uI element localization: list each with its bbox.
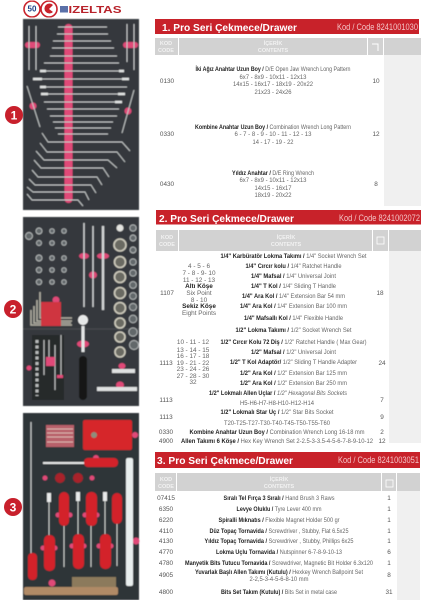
table rows: drawer 2: 4 - 5 - 6 (188, 263, 210, 270)
table rows: drawer 2: Sekiz Köşe (182, 303, 216, 310)
quantity column background: drawer 2 (389, 251, 421, 443)
table rows: drawer 3: 6350 (159, 506, 174, 513)
table rows: drawer 1: 6 - 7 - 8 - 9 - 10 - 11 - 12 - 13 (234, 131, 312, 138)
table rows: drawer 3: 6 (387, 549, 391, 556)
table rows: drawer 2: 1/4" Mafsallı Kol / 1/4" Flexible Handle (244, 315, 343, 322)
table rows: drawer 1: 14x15 - 16x17 - 18x19 - 20x22 (233, 81, 313, 88)
table rows: drawer 2: 19 - 21 - 22 (177, 360, 210, 367)
table rows: drawer 2: 2 (380, 429, 384, 436)
table rows: drawer 2: 13 - 14 - 15 (177, 347, 210, 354)
table rows: drawer 1: 18x19 - 20x22 (254, 192, 292, 199)
table header: drawer 2: CONTENTS (271, 242, 301, 248)
table rows: drawer 2: 0330 (159, 429, 174, 436)
table rows: drawer 2: 7 - 8 - 9- 10 (182, 270, 216, 277)
table header: drawer 2: İÇERİK (277, 234, 295, 241)
table rows: drawer 3: Manyetik Bits Tutucu Tornavida / Screwdriver, Magnetic Bit Holder 6.3x120 (185, 560, 373, 567)
table rows: drawer 2: 1/2" Lokmalı Allen Uçlar / 1/2" Hexagonal Bits Sockets (209, 390, 348, 397)
quantity column background: drawer 3 (397, 491, 420, 600)
table rows: drawer 3: 31 (385, 589, 393, 596)
table rows: drawer 2: 1/4" Ara Kol / 1/4" Extension Bar 54 mm (242, 293, 345, 300)
table rows: drawer 1: 14x15 - 16x17 (254, 185, 292, 192)
table rows: drawer 2: 1113 (159, 360, 173, 367)
table header: drawer 2 (156, 230, 421, 251)
table rows: drawer 1: İki Ağız Anahtar Uzun Boy / D/E Open Jaw Wrench Long Pattern (196, 64, 351, 73)
table rows: drawer 3: 4110 (159, 528, 173, 535)
heading band: drawer 1: 1. Pro Seri Çekmece/Drawer (162, 23, 297, 34)
table rows: drawer 1: Yıldız Anahtar / D/E Ring Wrench (232, 170, 314, 177)
table rows: drawer 3: 4905 (159, 572, 174, 579)
heading band: drawer 1 (155, 19, 419, 34)
table header: drawer 3 (155, 473, 420, 491)
table header: drawer 1: KOD (160, 41, 172, 47)
table rows: drawer 3 (157, 495, 393, 596)
table rows: drawer 3: 4130 (159, 538, 174, 545)
table rows: drawer 2: 1/4" Karbüratör Lokma Takımı / 1/4" Socket Wrench Set (220, 253, 367, 260)
table rows: drawer 2: 1113 (159, 414, 173, 421)
table rows: drawer 3: 1 (387, 528, 391, 535)
table rows: drawer 3: Bits Set Takım (Kutulu) / Bits Set in metal case (221, 589, 337, 596)
table rows: drawer 1: 6x7 - 8x9 - 10x11 - 12x13 (240, 177, 307, 184)
table rows: drawer 2: 1/2" Lokmalı Star Uç / 1/2" Star Bits Socket (220, 409, 334, 416)
table header: drawer 3: İÇERİK (270, 476, 288, 483)
table rows: drawer 1: 21x23 - 24x26 (254, 89, 292, 96)
table rows: drawer 2: 1/4" T Kol / 1/4" Sliding T Handle (251, 283, 336, 290)
table rows: drawer 3: 1 (387, 538, 391, 545)
table header: drawer 1: İÇERİK (264, 40, 282, 47)
table rows: drawer 3: Sıralı Tel Fırça 3 Sıralı / Hand Brush 3 Raws (224, 495, 334, 502)
table rows: drawer 3: 07415 (157, 495, 175, 502)
table header: drawer 1 (155, 38, 421, 55)
table rows: drawer 3: Yuvarlak Başlı Allen Takımı (Kutulu) / Hexkey Wrench Ballpoint Set (195, 569, 363, 576)
table rows: drawer 1: 0430 (160, 181, 175, 188)
table rows: drawer 3: 6220 (159, 517, 174, 524)
table rows: drawer 2: 1/2" Ara Kol / 1/2" Extension Bar 125 mm (240, 370, 347, 377)
table rows: drawer 3: Levye Oluklu / Tyre Lever 400 mm (236, 506, 322, 513)
table rows: drawer 3: 4780 (159, 560, 174, 567)
table header: drawer 1: CODE (158, 48, 174, 54)
table rows: drawer 1: 0130 (160, 78, 175, 85)
table rows: drawer 2: 9 (380, 414, 384, 421)
table rows: drawer 1: 12 (372, 131, 380, 138)
table rows: drawer 3: Düz Topaç Tornavida / Screwdriver , Stubby, Flat 6.5x25 (210, 528, 349, 535)
table rows: drawer 1: Kombine Anahtar Uzun Boy / Combination Wrench Long Pattern (195, 124, 351, 131)
table rows: drawer 3: 1 (387, 495, 391, 502)
heading band: drawer 3 (155, 452, 420, 468)
badge: 2: 2 (10, 302, 17, 316)
table rows: drawer 3: 8 (387, 572, 391, 579)
table rows: drawer 2: 8 - 10 (191, 297, 208, 304)
table rows: drawer 3: Lokma Uçlu Tornavida / Nutspinner 6-7-8-9-10-13 (216, 549, 342, 556)
badge: 1: 1 (11, 108, 18, 122)
table rows: drawer 1: 14 - 17 - 19 - 22 (252, 139, 294, 146)
table rows: drawer 2: 1113 (159, 397, 173, 404)
table rows: drawer 2: 1/2" Cırcır Kolu 72 Diş / 1/2" Ratchet Handle ( Max Gear) (220, 339, 367, 346)
logo: Izeltas 50 years (24, 1, 122, 17)
table rows: drawer 2: Altı Köşe (185, 283, 213, 290)
table rows: drawer 2: 4900 (159, 438, 174, 445)
table header: drawer 2: CODE (159, 242, 175, 248)
table rows: drawer 2: 1107 (160, 290, 174, 297)
heading band: drawer 2: 2. Pro Seri Çekmece/Drawer (159, 214, 294, 225)
table header: drawer 3: KOD (160, 477, 172, 483)
table rows: drawer 2: 18 (376, 290, 384, 297)
table rows: drawer 2: 1/2" Mafsal / 1/2" Universal Joint (251, 349, 336, 356)
heading band: drawer 2 (156, 210, 421, 225)
table header: drawer 3: CONTENTS (264, 484, 294, 490)
table rows: drawer 3: 4800 (159, 589, 174, 596)
table rows: drawer 1: 6x7 - 8x9 - 10x11 - 12x13 (240, 74, 307, 81)
table rows: drawer 2: 23 - 24 - 26 (177, 366, 210, 373)
table rows: drawer 2: 11 - 12 - 13 (183, 277, 216, 284)
table rows: drawer 2: 1/4" Ara Kol / 1/4" Extension Bar 100 mm (240, 303, 347, 310)
table rows: drawer 2: 1/2" T Kol Adaptör/ 1/2" Sliding T Handle Adapter (230, 359, 358, 366)
table rows: drawer 1: 8 (374, 181, 378, 188)
table rows: drawer 3: 4770 (159, 549, 174, 556)
logo: Izeltas 50 years: IZELTAS (68, 4, 122, 16)
table rows: drawer 3: Spiralli Mıknatıs / Flexible Magnet Holder 500 gr (218, 517, 340, 524)
panel: drawer 3 tool tray (23, 413, 140, 600)
table rows: drawer 2: T20-T25-T27-T30-T40-T45-T50-T55-T60 (224, 420, 330, 427)
table rows: drawer 2: 1/4" Cırcır kolu / 1/4" Ratchet Handle (246, 263, 342, 270)
table rows: drawer 2: 1/2" Ara Kol / 1/2" Extension Bar 250 mm (240, 380, 347, 387)
table rows: drawer 2: 1/2" Lokma Takımı / 1/2" Socket Wrench Set (236, 327, 352, 334)
table rows: drawer 3: 1 (387, 506, 391, 513)
heading band: drawer 3: 3. Pro Seri Çekmece/Drawer (157, 456, 293, 467)
table rows: drawer 2: Eight Points (182, 310, 216, 317)
badge: 2 (4, 300, 22, 318)
badge: 3: 3 (10, 500, 17, 514)
table rows: drawer 2: 7 (380, 397, 384, 404)
table rows: drawer 2 (159, 253, 386, 445)
table rows: drawer 2: 24 (378, 360, 386, 367)
table header: drawer 1: CONTENTS (258, 48, 288, 54)
table header: drawer 2: KOD (161, 235, 173, 241)
table rows: drawer 2: Kombine Anahtar Uzun Boy / Combination Wrench Long 16-18 mm (190, 429, 364, 436)
table rows: drawer 3: 1 (387, 560, 391, 567)
table rows: drawer 2: 10 - 11 - 12 (177, 339, 210, 346)
table rows: drawer 1: 10 (372, 78, 380, 85)
table rows: drawer 1: 0330 (160, 131, 175, 138)
table rows: drawer 2: Allen Takımı 6 Köşe / Hex Key Wrench Set 2-2.5-3-3.5-4-5-6-7-8-9-10-12 (181, 438, 373, 445)
table header: drawer 3: CODE (158, 484, 174, 490)
table rows: drawer 2: 16 - 17 - 18 (177, 353, 210, 360)
table rows: drawer 2: 27 - 28 - 30 (177, 373, 210, 380)
badge: 3 (4, 498, 22, 516)
panel: drawer 2 tool tray (23, 217, 139, 406)
table rows: drawer 2: 32 (189, 379, 197, 386)
table rows: drawer 2: Six Point (186, 290, 212, 297)
table rows: drawer 3: 2-2,5-3-4-5-6-8-10 mm (250, 576, 308, 583)
panel: drawer 1 tool tray (23, 19, 139, 210)
table rows: drawer 3: Yıldız Topaç Tornavida / Screwdriver , Stubby, Phillips 6x25 (204, 538, 354, 545)
quantity column background: drawer 1 (384, 55, 421, 206)
table rows: drawer 3: 1 (387, 517, 391, 524)
table rows: drawer 2: 1/4" Mafsal / 1/4" Universal Joint (251, 273, 336, 280)
logo: Izeltas 50 years: 50 (28, 4, 37, 14)
table rows: drawer 1 (160, 64, 380, 199)
badge: 1 (5, 106, 23, 124)
table rows: drawer 2: H5-H6-H7-H8-H10-H12-H14 (240, 400, 314, 407)
table rows: drawer 2: 12 (378, 438, 386, 445)
